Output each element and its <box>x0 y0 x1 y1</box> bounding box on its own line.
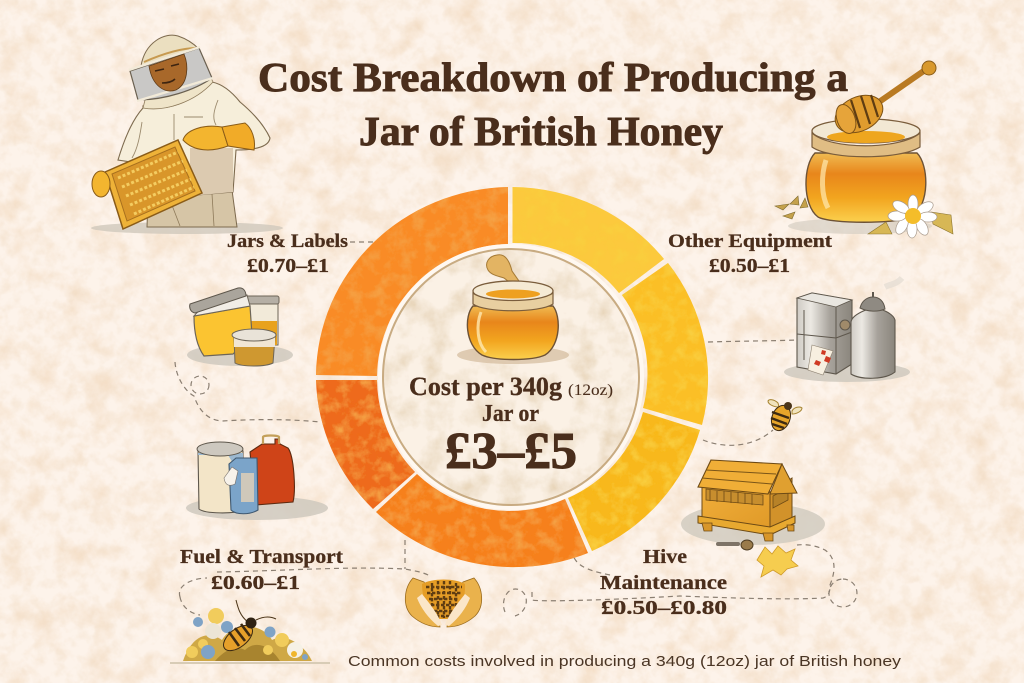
label: hive maintenance: Hive <box>643 546 687 568</box>
segment: fuel and transport <box>316 380 415 509</box>
white container <box>198 451 243 513</box>
steel box <box>797 293 852 374</box>
veil <box>130 48 212 100</box>
centre text: cost per jar <box>409 372 613 480</box>
fingers <box>417 594 442 626</box>
title: Jar of British Honey <box>359 108 723 154</box>
connector lines: dashed paths <box>175 242 857 616</box>
label: fuel and transport: Fuel & Transport <box>180 546 343 568</box>
left hand <box>405 578 440 627</box>
title <box>258 54 848 154</box>
label: other equipment: Other Equipment <box>668 231 833 252</box>
jar rim <box>812 119 920 143</box>
segment: hive maintenance <box>568 412 700 551</box>
steel smoker tank <box>851 308 895 378</box>
honey dipper <box>879 68 928 102</box>
icon: beekeeper holding a honeycomb frame <box>91 35 283 234</box>
label: hive maintenance: Maintenance <box>600 572 727 594</box>
segment: bottom orange <box>376 474 588 567</box>
centre text: cost per jar: Cost per 340g <box>409 372 562 401</box>
icon: equipment, extractor and smoker <box>784 278 910 382</box>
label: other equipment: £0.50–£1 <box>709 255 790 277</box>
blue bottle <box>229 458 258 514</box>
leaves <box>775 196 808 219</box>
roof <box>698 460 782 494</box>
donut chart: cost shares <box>316 187 708 567</box>
back jar <box>248 298 278 345</box>
label: jars and labels: £0.70–£1 <box>247 255 329 277</box>
icon: fuel and transport cans <box>186 436 328 520</box>
label: other equipment <box>668 231 833 277</box>
label: jars and labels <box>227 231 348 277</box>
title: Cost Breakdown of Producing a <box>258 54 848 100</box>
trousers <box>147 190 237 227</box>
label: fuel and transport: £0.60–£1 <box>211 572 300 594</box>
icon: centre honey jar <box>457 255 569 364</box>
segment: jars and labels <box>316 187 508 376</box>
large jar <box>194 306 252 356</box>
red fuel can <box>250 439 294 505</box>
centre disc <box>378 244 644 510</box>
cards <box>808 345 833 375</box>
centre text: cost per jar: £3–£5 <box>445 423 577 480</box>
collar <box>143 76 213 109</box>
hat dome <box>141 35 199 66</box>
suit body <box>118 82 270 198</box>
face <box>149 54 187 91</box>
label: fuel and transport <box>180 546 343 594</box>
centre text: cost per jar: Jar or <box>482 401 539 427</box>
yellow gloves <box>183 126 228 150</box>
icon: small dipper and pollen flower <box>718 540 798 577</box>
icon: bee on wildflowers <box>170 600 330 663</box>
icon: jars and tub <box>187 288 293 366</box>
centre text: cost per jar: (12oz) <box>568 382 613 399</box>
icon: honey jar with dipper and daisy <box>775 61 953 238</box>
honeycomb <box>422 580 465 619</box>
right hand <box>447 578 482 627</box>
daisy flower <box>888 195 937 238</box>
honeycomb frame <box>105 140 202 229</box>
jar body <box>806 153 926 222</box>
icon: wooden beehive <box>681 460 825 545</box>
segment: other equipment (top right) <box>512 187 664 293</box>
hive body <box>702 487 770 528</box>
bee <box>219 620 257 656</box>
icon: hands holding honeycomb <box>405 578 482 627</box>
label: hive maintenance <box>600 546 727 619</box>
base and feet <box>698 516 795 535</box>
segment: right yellow <box>622 263 708 425</box>
label: hive maintenance: £0.50–£0.80 <box>601 597 727 619</box>
footer caption: Common costs involved in producing a 340g (12oz) jar of British honey <box>348 653 902 670</box>
icon: flying bee <box>768 400 802 433</box>
label: jars and labels: Jars & Labels <box>227 231 348 252</box>
small tub <box>234 337 275 366</box>
